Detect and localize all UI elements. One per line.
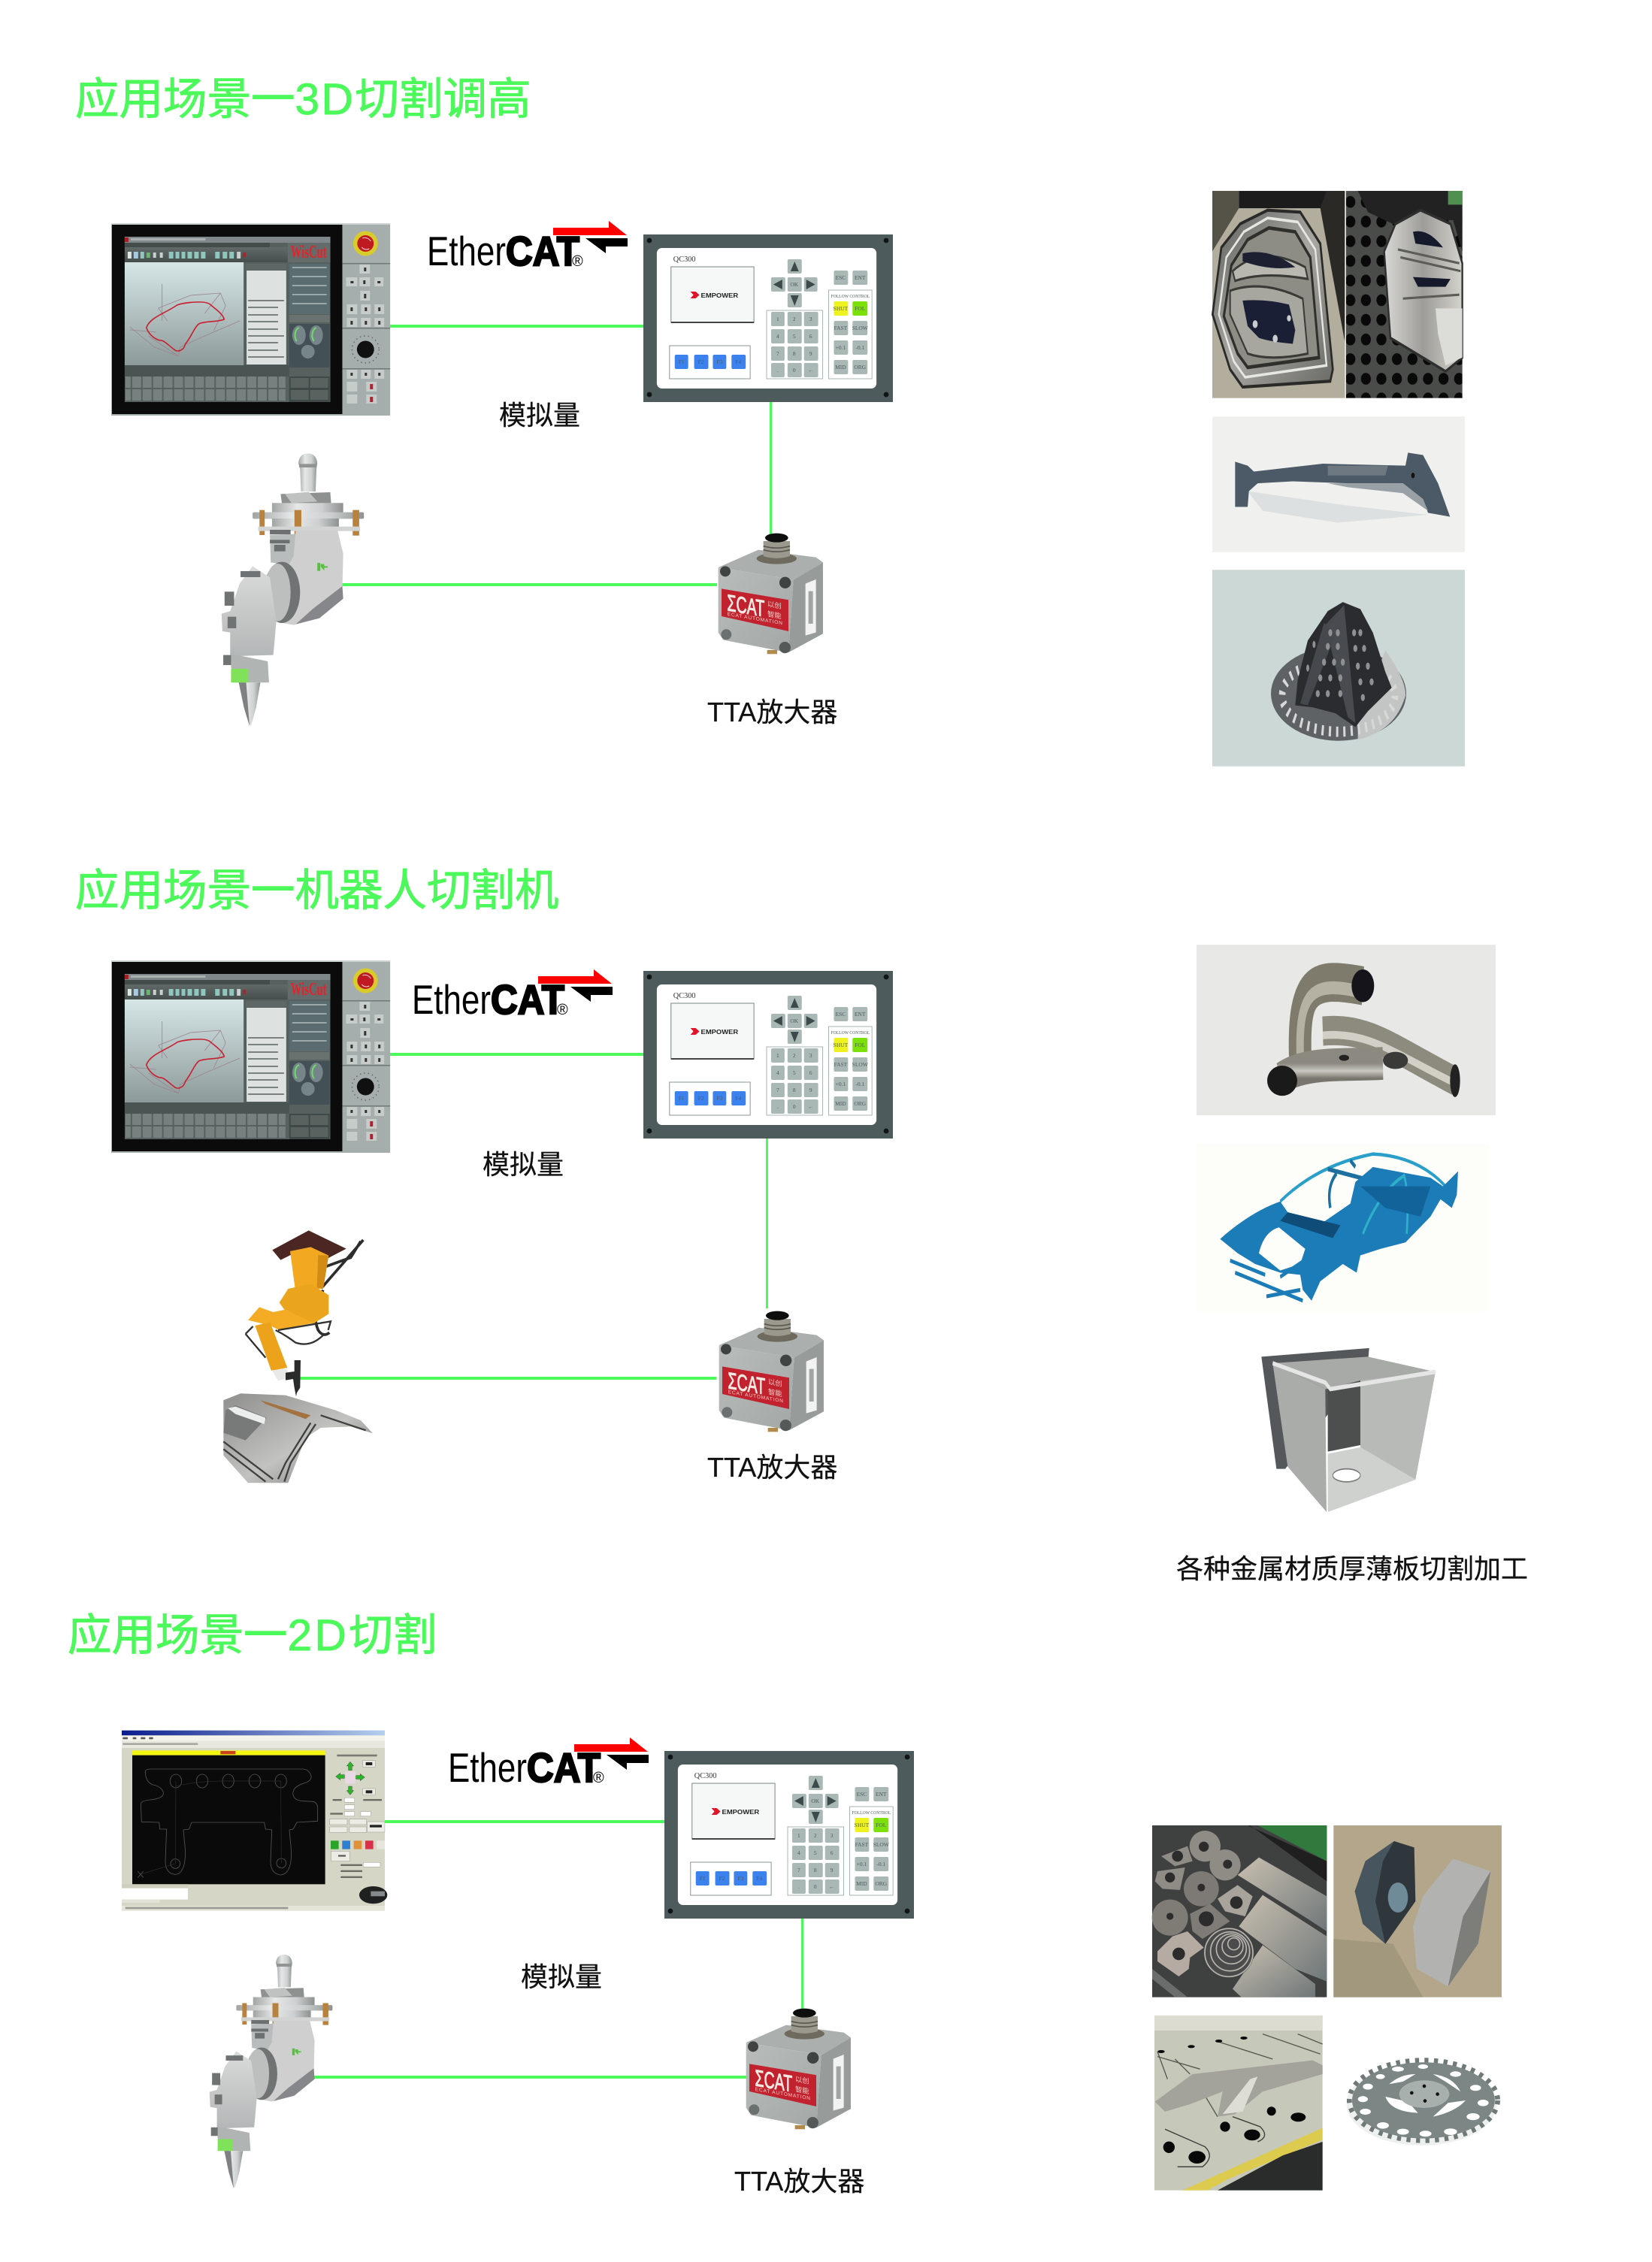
- QC300 controller: ENT: [855, 1011, 866, 1018]
- QC300 controller: -0.1: [855, 1081, 864, 1087]
- QC300 controller: F2: [719, 1875, 725, 1882]
- QC300 controller: ESC: [836, 274, 846, 281]
- QC300 controller: ←: [808, 1103, 813, 1110]
- TTA amplifier: 以创: [768, 1376, 782, 1389]
- QC300 controller: SLOW: [873, 1841, 890, 1848]
- QC300 controller: [643, 971, 893, 1139]
- label: analog: 模拟量: [499, 400, 580, 431]
- TTA amplifier: 以创: [767, 598, 782, 611]
- QC300 controller: 2: [814, 1832, 817, 1839]
- QC300 controller: FOL: [876, 1822, 887, 1828]
- QC300 controller: -0.1: [855, 344, 864, 351]
- photo: cut plate with parts: [1154, 2016, 1323, 2191]
- QC300 controller: EMPOWER: [701, 1028, 738, 1036]
- QC300 controller: FOL: [855, 1042, 866, 1048]
- QC300 controller: SLOW: [852, 325, 869, 331]
- touch screen CNC monitor: [111, 960, 390, 1153]
- label: TTA amplifier: TTA放大器: [707, 1452, 837, 1483]
- CAD cutting software screenshot: [122, 1731, 387, 1911]
- EtherCAT logo: Ether: [412, 976, 491, 1023]
- QC300 controller: QC300: [673, 255, 696, 264]
- QC300 controller: F4: [735, 358, 741, 365]
- section: robot cutting machine: [75, 866, 1528, 1584]
- EtherCAT logo: CAT: [491, 976, 564, 1023]
- QC300 controller: OK: [790, 1018, 799, 1024]
- QC300 controller: MID: [835, 1100, 846, 1107]
- QC300 controller: +0.1: [857, 1861, 867, 1867]
- QC300 controller: 0: [814, 1883, 817, 1890]
- label: TTA amplifier: TTA放大器: [707, 697, 837, 727]
- icon: laser cutting head: [210, 1955, 332, 2188]
- TTA amplifier: ΣCAT: [755, 2065, 792, 2097]
- QC300 controller: SHUT: [834, 1042, 849, 1048]
- QC300 controller: .: [777, 1103, 779, 1110]
- icon: yellow robot arm over car panel: [223, 1230, 373, 1483]
- QC300 controller: F4: [735, 1095, 741, 1102]
- EtherCAT logo: Ether: [448, 1744, 527, 1791]
- QC300 controller: F3: [737, 1875, 744, 1882]
- QC300 controller: ENT: [876, 1791, 887, 1798]
- photo: sheet metal box: [1261, 1348, 1436, 1512]
- QC300 controller: ESC: [857, 1791, 867, 1798]
- QC300 controller: 7: [776, 1087, 779, 1093]
- QC300 controller: 8: [793, 1087, 796, 1093]
- QC300 controller: .: [777, 367, 779, 373]
- QC300 controller: EMPOWER: [722, 1808, 759, 1816]
- TTA amplifier: ΣCAT: [728, 1368, 765, 1400]
- connection lines: [298, 1053, 768, 1380]
- QC300 controller: QC300: [673, 991, 696, 1000]
- QC300 controller: ←: [808, 367, 813, 373]
- QC300 controller: 0: [793, 367, 796, 373]
- QC300 controller: F2: [698, 358, 704, 365]
- photo: bent metal tubes: [1197, 945, 1496, 1115]
- QC300 controller: 4: [776, 333, 779, 340]
- label: analog: 模拟量: [483, 1149, 564, 1180]
- TTA amplifier: [719, 1311, 824, 1432]
- EtherCAT logo: [412, 969, 613, 1023]
- QC300 controller: 4: [776, 1069, 779, 1076]
- section: 2D cutting: [68, 1611, 1502, 2197]
- QC300 controller: F3: [716, 358, 723, 365]
- QC300 controller: +0.1: [836, 344, 846, 351]
- QC300 controller: -0.1: [876, 1861, 885, 1867]
- TTA amplifier: 智能: [768, 1386, 782, 1399]
- photo: perforated cone part: [1212, 570, 1465, 767]
- QC300 controller: 3: [809, 316, 812, 322]
- QC300 controller: 6: [809, 1069, 812, 1076]
- QC300 controller: 3: [831, 1832, 834, 1839]
- EtherCAT logo: Ether: [427, 228, 506, 274]
- QC300 controller: ←: [829, 1883, 834, 1890]
- caption: metal sheet cutting: 各种金属材质厚薄板切割加工: [1176, 1553, 1528, 1584]
- EtherCAT logo: ®: [572, 253, 583, 270]
- TTA amplifier: ΣCAT: [727, 590, 764, 622]
- QC300 controller: F1: [679, 358, 685, 365]
- label: TTA amplifier: TTA放大器: [734, 2166, 864, 2197]
- TTA amplifier: ECAT AUTOMATION: [728, 612, 782, 626]
- touch screen CNC monitor: [111, 223, 390, 416]
- EtherCAT logo: [427, 221, 628, 274]
- TTA amplifier: 智能: [795, 2083, 809, 2096]
- QC300 controller: ENT: [855, 274, 866, 281]
- TTA amplifier: 以创: [795, 2073, 809, 2086]
- QC300 controller: 8: [793, 350, 796, 357]
- QC300 controller: 6: [831, 1849, 834, 1856]
- QC300 controller: F1: [700, 1875, 706, 1882]
- photo: blue car body frame: [1197, 1143, 1490, 1311]
- QC300 controller: F4: [756, 1875, 762, 1882]
- photo: thick steel blocks: [1333, 1825, 1502, 1997]
- QC300 controller: MID: [835, 364, 846, 370]
- title: 2D scene: 应用场景一2D切割: [68, 1611, 437, 1660]
- touch screen CNC monitor: WisCut: [291, 980, 327, 999]
- QC300 controller: 9: [809, 350, 812, 357]
- QC300 controller: FOLLOW CONTROL: [852, 1811, 891, 1816]
- TTA amplifier: ECAT AUTOMATION: [728, 1390, 783, 1404]
- EtherCAT logo: [448, 1737, 649, 1791]
- QC300 controller: EMPOWER: [701, 292, 738, 299]
- QC300 controller: F1: [679, 1095, 685, 1102]
- QC300 controller: 0: [793, 1103, 796, 1110]
- TTA amplifier: [719, 534, 823, 654]
- QC300 controller: FOLLOW CONTROL: [831, 1031, 870, 1036]
- connection lines: [342, 325, 772, 586]
- QC300 controller: 7: [776, 350, 779, 357]
- title: robot scene: 应用场景一机器人切割机: [75, 866, 559, 915]
- QC300 controller: 1: [797, 1832, 800, 1839]
- EtherCAT logo: CAT: [527, 1744, 601, 1791]
- TTA amplifier: ECAT AUTOMATION: [755, 2087, 810, 2101]
- QC300 controller: [664, 1751, 914, 1919]
- label: analog: 模拟量: [521, 1961, 602, 1992]
- QC300 controller: [643, 234, 893, 402]
- QC300 controller: FAST: [834, 1061, 848, 1068]
- photo: laser cut disc: [1347, 2061, 1498, 2146]
- title: 3D scene: 应用场景一3D切割调高: [75, 75, 531, 124]
- QC300 controller: SHUT: [834, 305, 849, 312]
- QC300 controller: 5: [814, 1849, 817, 1856]
- QC300 controller: 9: [831, 1867, 834, 1873]
- QC300 controller: FAST: [834, 325, 848, 331]
- QC300 controller: ORG: [854, 1100, 867, 1107]
- QC300 controller: MID: [856, 1880, 867, 1887]
- QC300 controller: ORG: [875, 1880, 888, 1887]
- QC300 controller: SHUT: [855, 1822, 870, 1828]
- EtherCAT logo: ®: [593, 1770, 604, 1786]
- QC300 controller: 4: [797, 1849, 800, 1856]
- QC300 controller: QC300: [694, 1771, 717, 1780]
- QC300 controller: F3: [716, 1095, 723, 1102]
- QC300 controller: 8: [814, 1867, 817, 1873]
- TTA amplifier: 智能: [767, 608, 782, 621]
- QC300 controller: 1: [776, 1052, 779, 1059]
- QC300 controller: FOL: [855, 305, 866, 312]
- QC300 controller: +0.1: [836, 1081, 846, 1087]
- photo: cut gears and stacked blocks: [1152, 1825, 1327, 1997]
- QC300 controller: 2: [793, 316, 796, 322]
- QC300 controller: 7: [797, 1867, 800, 1873]
- TTA amplifier: [746, 2009, 851, 2129]
- photo: car pillar part: [1212, 416, 1465, 552]
- QC300 controller: OK: [811, 1798, 820, 1804]
- QC300 controller: 3: [809, 1052, 812, 1059]
- QC300 controller: FOLLOW CONTROL: [831, 295, 870, 299]
- icon: 3D laser cutting head: [222, 453, 364, 727]
- QC300 controller: .: [798, 1883, 800, 1890]
- QC300 controller: 5: [793, 1069, 796, 1076]
- QC300 controller: 1: [776, 316, 779, 322]
- touch screen CNC monitor: WisCut: [291, 243, 327, 262]
- QC300 controller: ORG: [854, 364, 867, 370]
- QC300 controller: OK: [790, 281, 799, 288]
- QC300 controller: FAST: [855, 1841, 869, 1848]
- QC300 controller: 9: [809, 1087, 812, 1093]
- EtherCAT logo: ®: [557, 1002, 568, 1018]
- photo: stamped parts on fixture: [1212, 191, 1463, 398]
- QC300 controller: 5: [793, 333, 796, 340]
- EtherCAT logo: CAT: [506, 228, 579, 274]
- section: 3D cutting height control: [75, 75, 1465, 767]
- QC300 controller: ESC: [836, 1011, 846, 1018]
- QC300 controller: SLOW: [852, 1061, 869, 1068]
- QC300 controller: 2: [793, 1052, 796, 1059]
- QC300 controller: F2: [698, 1095, 704, 1102]
- QC300 controller: 6: [809, 333, 812, 340]
- connection lines: [310, 1820, 803, 2079]
